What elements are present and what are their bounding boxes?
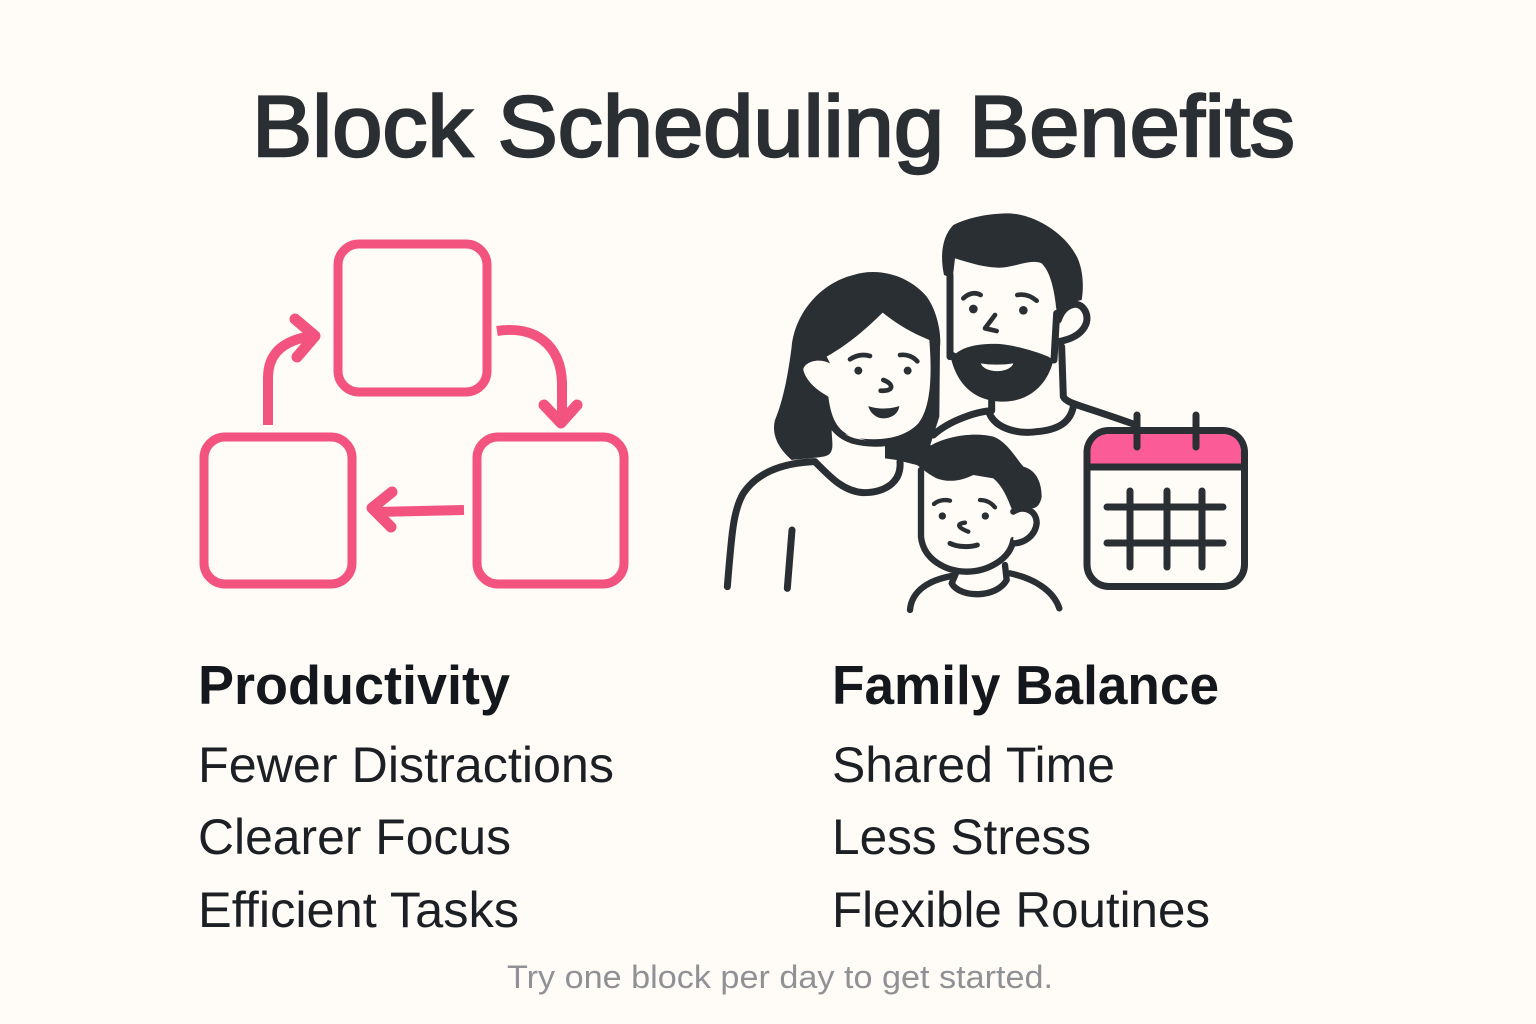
calendar rings bbox=[1137, 415, 1196, 447]
calendar body bbox=[1087, 430, 1244, 586]
item: Shared Time bbox=[832, 737, 1115, 793]
list: family balance benefits bbox=[832, 737, 1210, 938]
heading: productivity: Productivity bbox=[198, 654, 510, 716]
left block bbox=[204, 437, 352, 584]
list: productivity benefits bbox=[198, 737, 614, 938]
woman bbox=[727, 272, 940, 588]
icon: family illustration bbox=[727, 213, 1133, 610]
item: Efficient Tasks bbox=[198, 882, 519, 938]
footer note: Try one block per day to get started. bbox=[507, 959, 1053, 995]
boy bbox=[885, 435, 1059, 610]
title: Block Scheduling Benefits bbox=[252, 79, 1295, 175]
item: Fewer Distractions bbox=[198, 737, 614, 793]
top block bbox=[338, 244, 487, 392]
calendar header rule bbox=[1088, 464, 1244, 470]
icon: calendar bbox=[1087, 415, 1244, 586]
item: Clearer Focus bbox=[198, 809, 511, 865]
arrow: right block to left block bbox=[372, 492, 464, 527]
item: Less Stress bbox=[832, 809, 1091, 865]
icon: productivity cycle of three blocks bbox=[204, 244, 624, 584]
heading: family balance: Family Balance bbox=[832, 654, 1219, 716]
man bbox=[933, 213, 1133, 435]
calendar grid bbox=[1107, 491, 1223, 567]
arrow: top block to right block bbox=[497, 330, 577, 423]
arrow: left block to top block bbox=[268, 319, 315, 425]
calendar pink header bbox=[1090, 434, 1241, 467]
item: Flexible Routines bbox=[832, 882, 1210, 938]
right block bbox=[477, 437, 624, 584]
